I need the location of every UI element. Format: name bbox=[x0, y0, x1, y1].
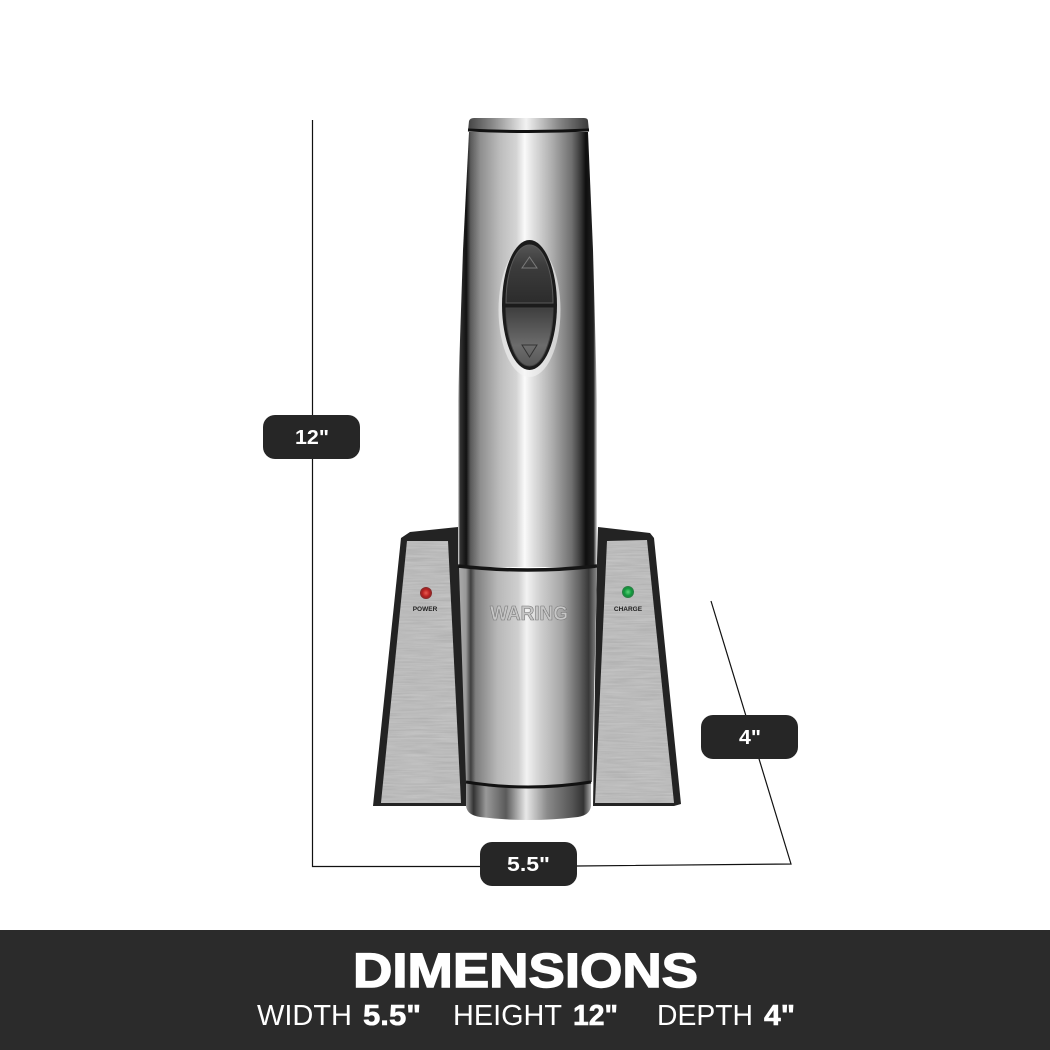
footer width value: WIDTH bbox=[257, 1000, 352, 1032]
width pill: 5.5" bbox=[507, 854, 550, 876]
down arrow bbox=[522, 345, 537, 357]
footer banner bbox=[0, 930, 1050, 1050]
power label: POWER bbox=[413, 606, 438, 613]
footer depth value: 4" bbox=[764, 1000, 795, 1032]
opener bottom ring bbox=[466, 782, 591, 820]
opener lower cup bbox=[459, 568, 597, 787]
control button glow bbox=[498, 243, 560, 377]
left charging base bbox=[373, 527, 467, 806]
charge indicator bbox=[622, 586, 634, 598]
footer height value bbox=[453, 1000, 618, 1032]
opener upper body bbox=[458, 132, 597, 567]
depth pill: 4" bbox=[739, 727, 761, 749]
footer depth value: DEPTH bbox=[657, 1000, 753, 1032]
control button bbox=[502, 240, 557, 370]
up arrow bbox=[522, 257, 537, 268]
brand logo: WARING bbox=[490, 603, 568, 625]
footer height value: HEIGHT bbox=[453, 1000, 562, 1032]
product: electric wine opener on charging base bbox=[373, 118, 681, 820]
seam band bbox=[458, 566, 597, 570]
footer width value bbox=[257, 1000, 421, 1032]
power indicator bbox=[420, 587, 432, 599]
footer width value: 5.5" bbox=[363, 1000, 421, 1032]
width pill bbox=[480, 842, 577, 886]
opener cap bbox=[468, 118, 589, 132]
footer height value: 12" bbox=[573, 1000, 618, 1032]
footer heading: DIMENSIONS bbox=[353, 945, 698, 998]
dimension line: height and width bbox=[312, 120, 791, 866]
charge label: CHARGE bbox=[614, 606, 643, 613]
height pill: 12" bbox=[295, 427, 329, 449]
height pill bbox=[263, 415, 360, 459]
right charging base bbox=[593, 527, 681, 806]
depth pill bbox=[701, 715, 798, 759]
